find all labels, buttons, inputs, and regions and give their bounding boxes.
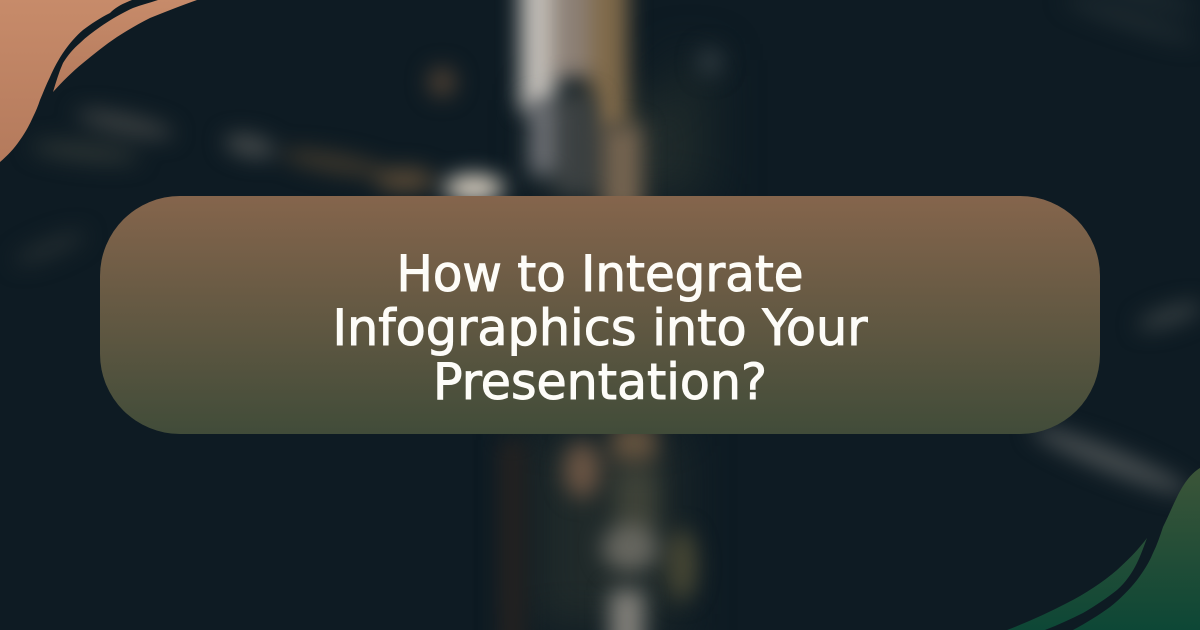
title line 3: Presentation? bbox=[433, 353, 767, 411]
top-left peach wave bbox=[0, 0, 197, 162]
title line 1: How to Integrate bbox=[396, 245, 804, 303]
bottom-right green wave bbox=[1007, 468, 1200, 630]
title line 2: Infographics into Your bbox=[332, 299, 868, 357]
title pill bbox=[100, 196, 1100, 434]
title bbox=[332, 245, 868, 411]
